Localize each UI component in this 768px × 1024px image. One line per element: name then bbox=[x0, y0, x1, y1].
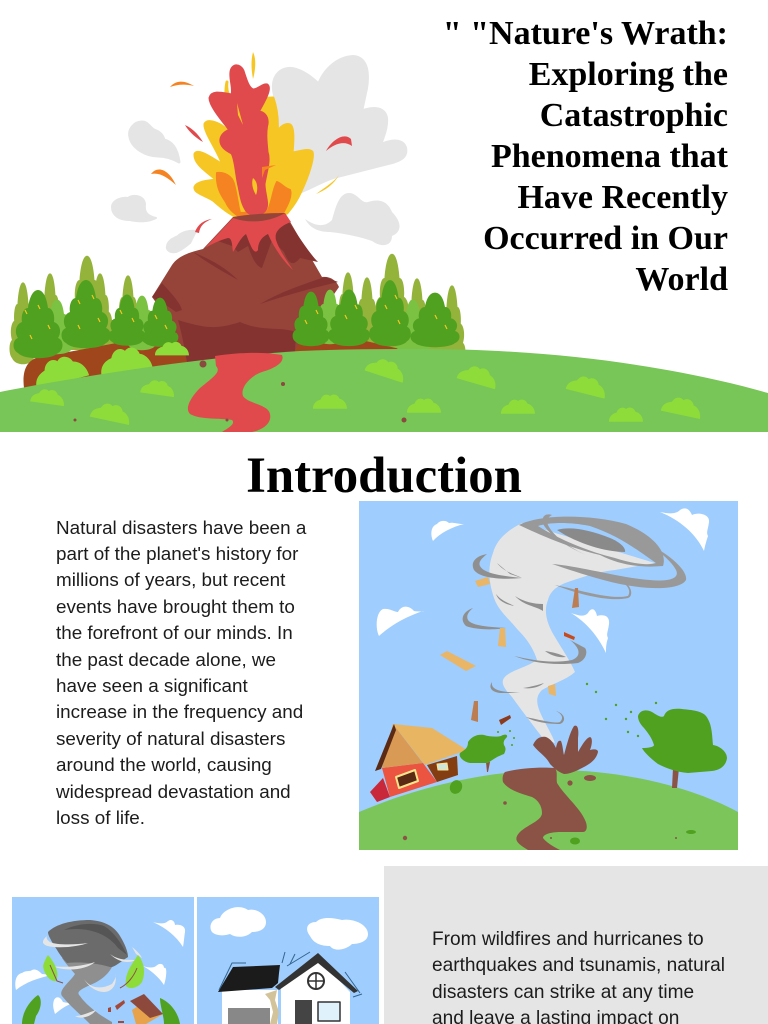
garage door bbox=[228, 1008, 270, 1024]
front window bbox=[318, 1002, 340, 1021]
illustration: dark tornado panel bbox=[12, 897, 194, 1024]
title: World bbox=[635, 261, 728, 298]
middle trees bbox=[40, 290, 430, 354]
hill tufts and stones bbox=[30, 354, 703, 425]
text block: grey panel: earthquakes and tsunamis, natural bbox=[432, 955, 725, 976]
brown ground under trees bbox=[24, 340, 398, 388]
sky bbox=[359, 501, 738, 812]
text block: introduction: increase in the frequency and bbox=[56, 701, 303, 722]
volcano bbox=[152, 213, 339, 362]
text block: introduction: millions of years, but recent bbox=[56, 569, 285, 590]
round window bbox=[308, 973, 324, 989]
illustration: tornado scene bbox=[359, 501, 738, 850]
illustration: cracked house panel bbox=[197, 897, 379, 1024]
lava sparks bbox=[151, 52, 352, 233]
text block: grey panel: disasters can strike at any time bbox=[432, 982, 694, 1003]
text block: introduction: around the world, causing bbox=[56, 754, 272, 775]
text block: introduction: Natural disasters have been a bbox=[56, 516, 306, 538]
back tree line bbox=[10, 254, 465, 367]
sky bbox=[12, 897, 194, 1024]
text block: introduction: the forefront of our minds. In bbox=[56, 622, 293, 643]
tree leaf flecks bbox=[25, 295, 447, 339]
text block: grey panel bbox=[432, 929, 725, 1024]
bent trees bbox=[460, 709, 727, 788]
text block: introduction: events have brought them to bbox=[56, 596, 295, 617]
black roof bbox=[218, 965, 280, 992]
front trees bbox=[14, 280, 460, 358]
green spots bbox=[448, 778, 696, 844]
title: " "Nature's Wrath: bbox=[443, 15, 728, 52]
text block: introduction bbox=[56, 516, 306, 828]
white clouds bbox=[377, 508, 709, 653]
text block: introduction: loss of life. bbox=[56, 807, 145, 828]
mud spots bbox=[403, 775, 677, 840]
text block: introduction: the past decade alone, we bbox=[56, 649, 276, 670]
gable roof bbox=[275, 953, 358, 993]
illustration: erupting volcano bbox=[0, 52, 768, 432]
title: Have Recently bbox=[517, 179, 728, 216]
tornado head bbox=[48, 920, 128, 967]
title: Phenomena that bbox=[491, 138, 728, 175]
light bushes bbox=[36, 342, 189, 386]
tornado funnel bbox=[61, 958, 113, 1024]
front door bbox=[295, 1000, 312, 1024]
eruption flames bbox=[195, 66, 312, 223]
wall crack bbox=[265, 990, 279, 1024]
text block: introduction: severity of natural disasters bbox=[56, 728, 285, 749]
lava river bbox=[188, 353, 283, 432]
grey text panel bbox=[384, 866, 768, 1024]
white swirls bbox=[43, 936, 142, 1018]
title: Occurred in Our bbox=[483, 220, 728, 257]
debris bbox=[108, 1000, 125, 1023]
smoke clouds bbox=[112, 59, 403, 252]
title: Exploring the bbox=[529, 56, 728, 93]
flying debris bbox=[440, 577, 579, 725]
flying house bbox=[130, 994, 163, 1024]
sky bbox=[197, 897, 379, 1024]
window cross bbox=[308, 973, 324, 989]
shake lines bbox=[219, 952, 362, 997]
text block: introduction: have seen a significant bbox=[56, 675, 248, 696]
green hill bbox=[0, 349, 768, 432]
uprooted tree stump bbox=[533, 726, 598, 774]
funnel swirl bands bbox=[463, 554, 586, 724]
title bbox=[443, 15, 728, 298]
heading: Introduction: Introduction bbox=[246, 447, 522, 503]
green hill bbox=[359, 770, 738, 850]
text block: grey panel: From wildfires and hurricanes to bbox=[432, 929, 704, 950]
text block: introduction: part of the planet's history for bbox=[56, 543, 298, 564]
mud trail bbox=[503, 768, 587, 850]
title: Catastrophic bbox=[540, 97, 728, 134]
white walls bbox=[222, 958, 350, 1024]
flying leaves bbox=[497, 683, 657, 746]
leaves bbox=[22, 955, 180, 1024]
white clouds bbox=[210, 907, 368, 950]
funnel bbox=[489, 523, 655, 743]
white clouds bbox=[15, 920, 185, 1014]
house bbox=[370, 724, 467, 802]
funnel top rings bbox=[519, 514, 686, 599]
text block: introduction: widespread devastation and bbox=[56, 781, 291, 802]
